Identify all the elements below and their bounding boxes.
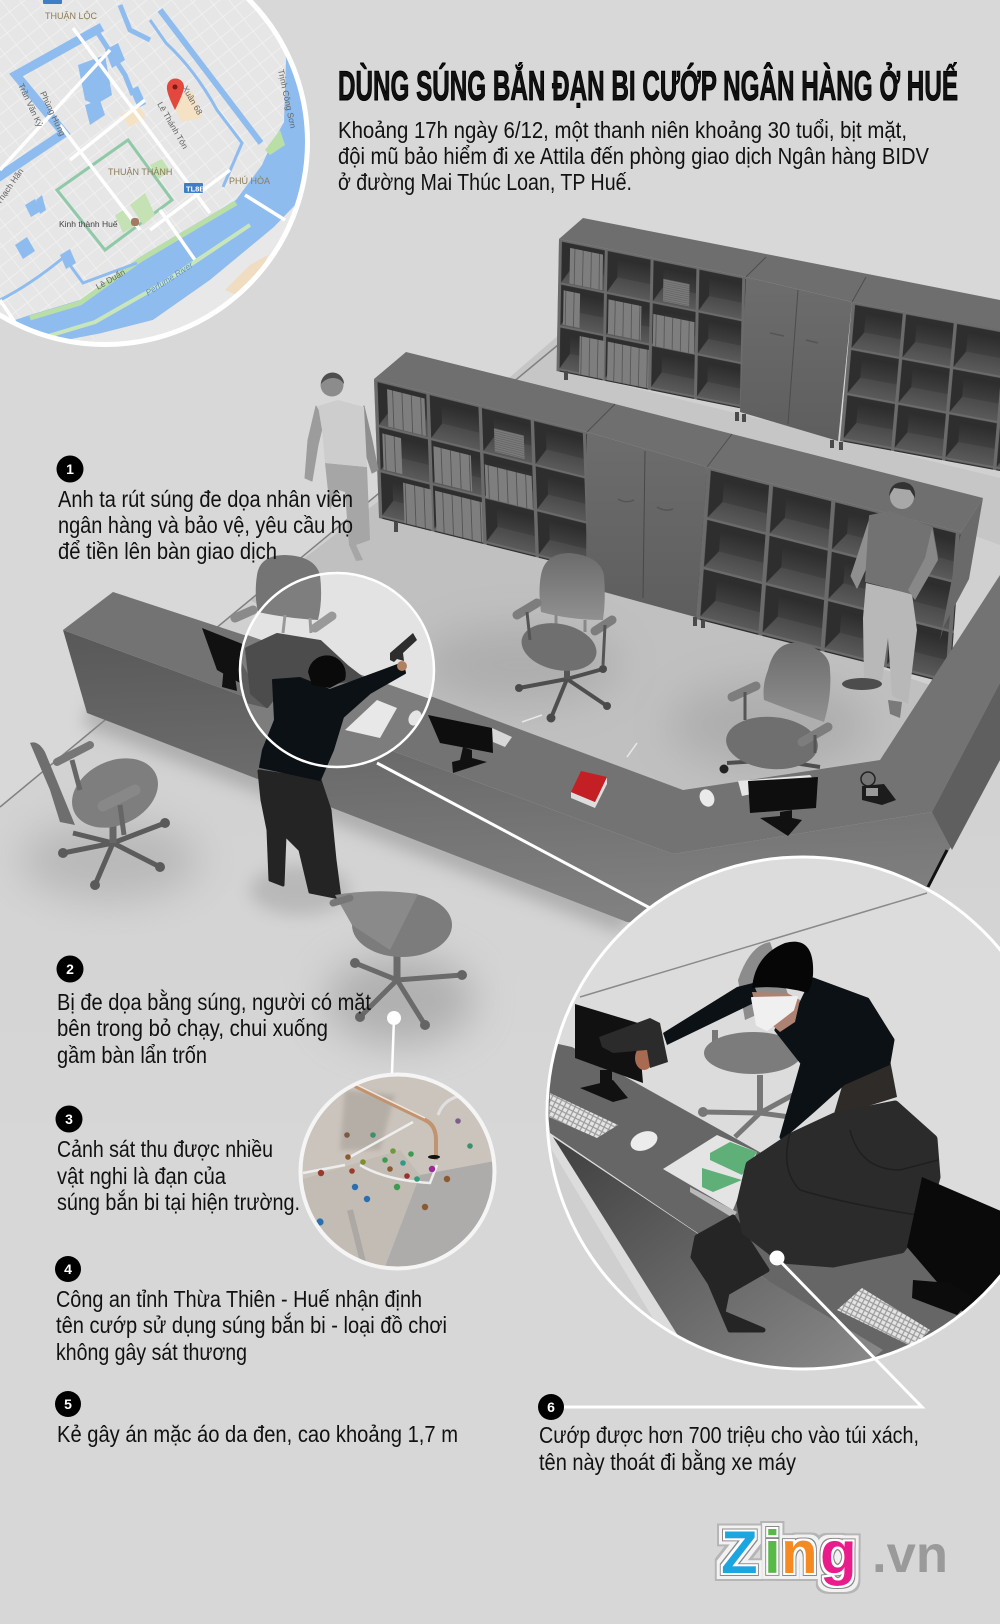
counter top surface — [63, 575, 1000, 854]
zoom circle 1 outline — [240, 573, 434, 767]
chair behind robber — [235, 555, 332, 628]
keyboard 2 in zoom — [837, 1288, 930, 1347]
zoom circle 1 on robber — [241, 574, 433, 766]
step 4: tên cướp sử dụng súng bắn bi - loại đồ chơi — [56, 1312, 447, 1338]
monitor 2 in zoom — [907, 1177, 1000, 1317]
step 6: 6 — [547, 1399, 555, 1415]
map labels: Xuân 68 — [180, 84, 205, 117]
gun in zoom — [599, 1018, 668, 1068]
main roads — [0, 28, 285, 345]
chair D bottom centre — [333, 891, 467, 1030]
north bank green — [30, 203, 236, 318]
intro text: đội mũ bảo hiểm đi xe Attila đến phòng giao dịch Ngân hàng BIDV — [338, 143, 930, 169]
robber trousers in zoom — [834, 1063, 897, 1113]
step 5: 5 — [64, 1396, 72, 1412]
logo: g — [820, 1519, 857, 1586]
step 3: Cảnh sát thu được nhiều — [57, 1136, 273, 1162]
chrome chair leg — [355, 1086, 436, 1160]
zoom circle 2: robber taking the money — [540, 850, 1000, 1400]
robber head — [308, 655, 346, 688]
bag straps in zoom — [693, 1217, 767, 1330]
map labels: Perfume River — [144, 259, 196, 298]
step 1: ngân hàng và bảo vệ, yêu cầu họ — [58, 512, 353, 538]
step 4: Công an tỉnh Thừa Thiên - Huế nhận định — [56, 1286, 422, 1312]
step 2: Bị đe dọa bằng súng, người có mặt — [57, 989, 372, 1015]
robber — [259, 633, 417, 898]
citadel buildings — [15, 43, 146, 269]
robber head in zoom — [752, 942, 813, 993]
step 1 — [56, 456, 353, 564]
step 2: 2 — [66, 961, 74, 977]
step 3: 3 — [65, 1111, 73, 1127]
pens on floor — [522, 715, 637, 757]
robber jacket in zoom — [663, 983, 760, 1045]
map labels: Lê Thánh Tôn — [155, 100, 190, 151]
map labels: PHÚ HÒA — [229, 176, 270, 186]
lower floor — [551, 1149, 653, 1318]
step 6: tên này thoát đi bằng xe máy — [539, 1449, 796, 1475]
step 3: vật nghi là đạn của — [57, 1163, 226, 1189]
monitor 1 in zoom — [575, 1004, 643, 1102]
monitor and keyboard right — [738, 775, 818, 836]
counter front in zoom — [553, 1137, 883, 1385]
back cabinet — [740, 277, 852, 441]
monitor and keyboard on counter — [428, 715, 512, 773]
connector from circle 1 to circle 2 — [377, 763, 650, 908]
front bookcase with binders — [374, 379, 592, 571]
back row top surface — [559, 218, 1000, 330]
red book — [571, 771, 607, 808]
mouse — [408, 710, 422, 726]
map labels: Trịnh Công Sơn — [276, 68, 298, 129]
back bookcase with binders — [556, 239, 746, 409]
step 4 — [55, 1256, 447, 1365]
chair A inside office — [515, 553, 612, 722]
map labels — [0, 0, 298, 298]
robber hand — [397, 661, 407, 671]
back empty bookcase — [840, 302, 1000, 480]
bookcase end panel — [940, 498, 983, 640]
map labels: Lê Duẩn — [94, 267, 127, 292]
chair C bottom left — [30, 742, 170, 890]
step 1: để tiền lên bàn giao dịch — [58, 538, 277, 564]
step 5 — [55, 1391, 458, 1447]
map labels: TL8B — [186, 184, 205, 194]
counter front face — [63, 630, 1000, 930]
logo — [721, 1519, 948, 1586]
bookcase row: front — [374, 352, 983, 684]
logo: i — [764, 1519, 781, 1586]
robber trousers — [259, 771, 340, 898]
bag under counter glass — [247, 635, 360, 706]
reception counter — [63, 575, 1000, 930]
paper — [345, 700, 397, 738]
guard right — [842, 482, 938, 718]
step 3 — [56, 1106, 300, 1215]
logo: .vn — [872, 1526, 948, 1584]
front cabinet — [586, 432, 707, 618]
map pin — [167, 78, 184, 110]
front row top surface — [374, 352, 983, 532]
callout dot and leader line for step 6 — [563, 1250, 922, 1407]
south bank — [94, 206, 294, 342]
step 4: không gây sát thương — [56, 1339, 247, 1365]
citadel moat — [0, 5, 261, 300]
office floor — [0, 333, 1000, 1624]
front legs — [396, 522, 703, 628]
map labels: Trần Văn Kỷ — [16, 82, 45, 129]
pellets — [316, 1118, 473, 1226]
map labels: Phùng Hưng — [38, 90, 68, 138]
intro text: Khoảng 17h ngày 6/12, một thanh niên khoảng 30 tuổi, bịt mặt, — [338, 117, 907, 143]
step 2: bên trong bỏ chạy, chui xuống — [57, 1015, 328, 1041]
step 2: gầm bàn lẩn trốn — [57, 1042, 207, 1068]
step 3: súng bắn bi tại hiện trường. — [57, 1189, 300, 1215]
logo: n — [781, 1519, 818, 1586]
bag in zoom — [741, 1105, 936, 1263]
telephone — [861, 772, 896, 805]
keyboard 1 in zoom — [549, 1093, 618, 1138]
money in zoom — [702, 1142, 757, 1192]
zoom circle 2 outline — [547, 857, 1000, 1369]
map labels: Kinh thành Huế — [59, 219, 118, 229]
mouse right — [697, 787, 717, 809]
guard left — [305, 372, 378, 561]
face and mask in zoom — [752, 992, 800, 1032]
step 6 — [538, 1394, 919, 1475]
intro text — [338, 117, 930, 195]
floor line — [580, 893, 927, 997]
chair B inside office — [720, 643, 830, 774]
map labels: THUẬN THÀNH — [108, 167, 172, 177]
logo: Z — [721, 1519, 758, 1586]
map labels: THUẬN LỘC — [45, 11, 98, 21]
step 1: Anh ta rút súng đe dọa nhân viên — [58, 486, 353, 512]
hand in zoom — [635, 1050, 650, 1070]
robber jacket — [260, 663, 405, 780]
intro text: ở đường Mai Thúc Loan, TP Huế. — [338, 169, 632, 195]
front empty bookcase — [696, 467, 961, 684]
bookcase row: back — [556, 218, 1000, 480]
step 5: Kẻ gây án mặc áo da đen, cao khoảng 1,7 m — [57, 1421, 458, 1447]
mouse in zoom — [630, 1131, 658, 1151]
chair behind robber in zoom — [698, 942, 802, 1137]
callout dot and leader line for step 3 — [387, 1011, 401, 1073]
step 6: Cướp được hơn 700 triệu cho vào túi xách, — [539, 1422, 919, 1448]
imperial city outline — [57, 140, 172, 250]
zoom circle 3: pellets on the floor — [295, 1070, 500, 1280]
step 1: 1 — [66, 461, 74, 477]
robber gun — [390, 633, 417, 662]
back legs — [566, 371, 841, 450]
river — [16, 56, 305, 339]
step 4: 4 — [64, 1261, 72, 1277]
step 2 — [56, 956, 372, 1068]
counter top in zoom — [548, 1044, 962, 1357]
location map — [0, 0, 330, 360]
monitor left on counter — [202, 628, 245, 691]
papers in zoom — [663, 1135, 757, 1210]
